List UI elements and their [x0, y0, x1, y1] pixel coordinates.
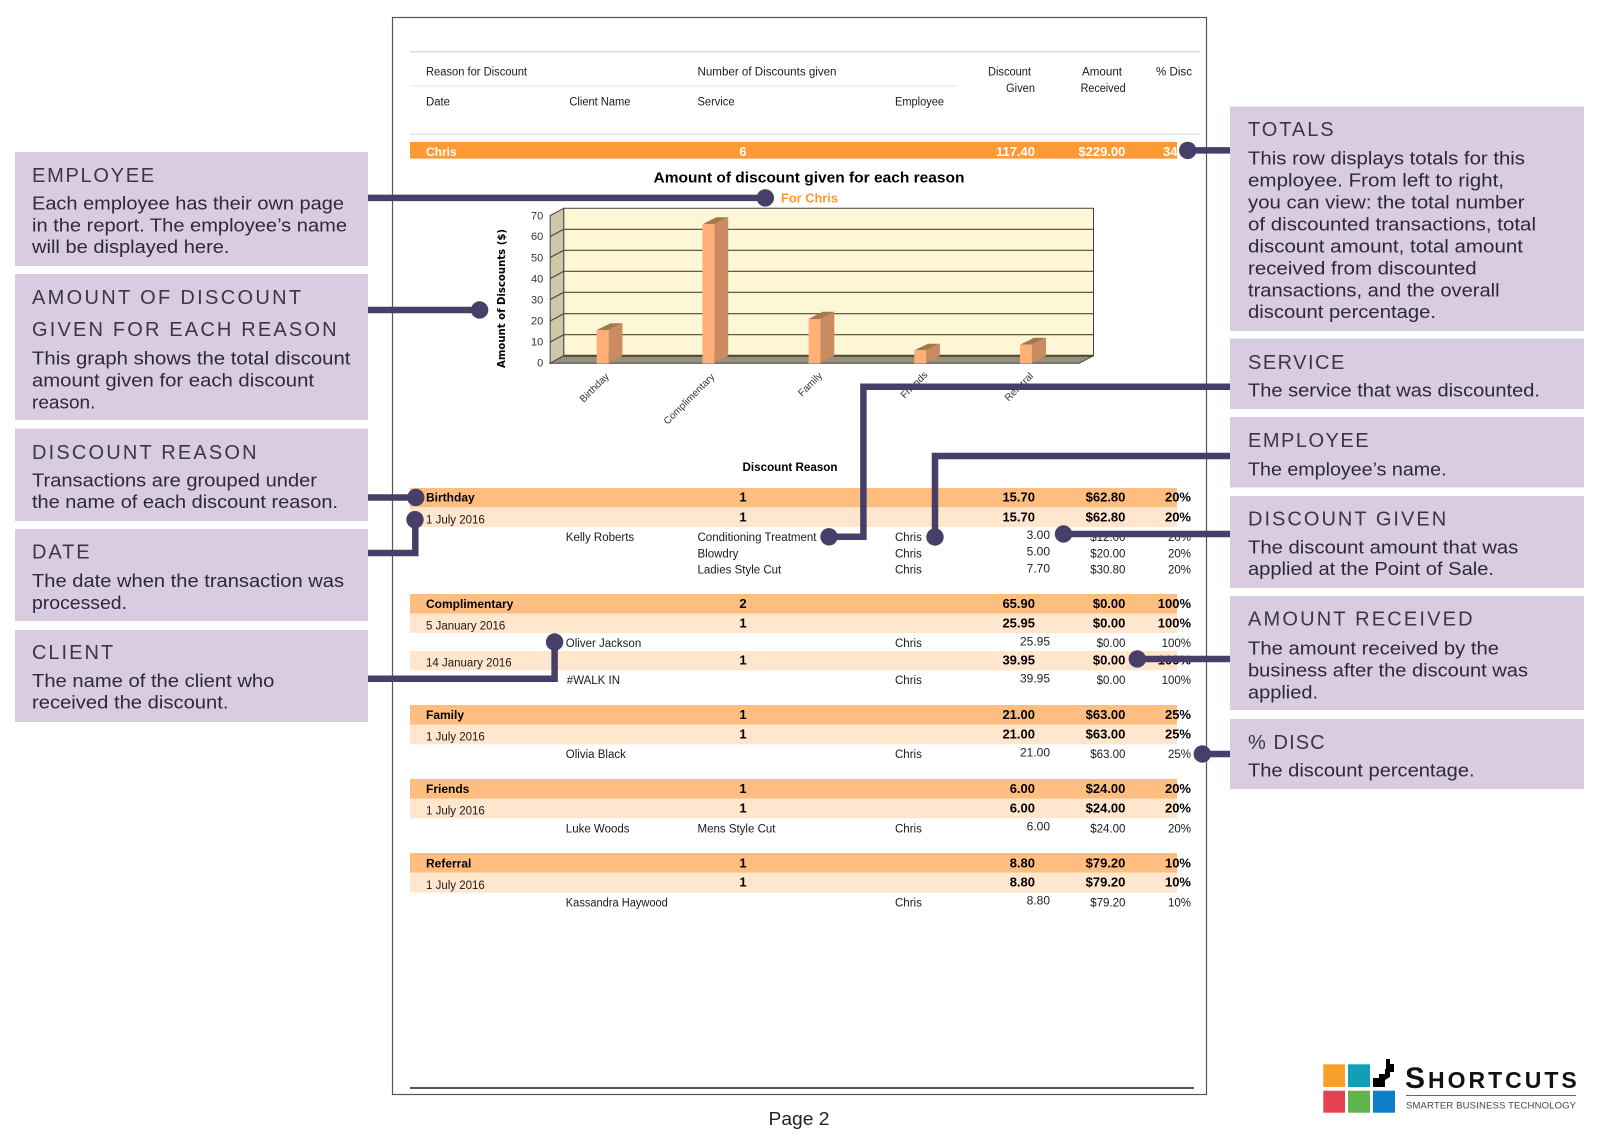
- axis labels: 10: [531, 337, 543, 349]
- group: Complimentary: Chris: [895, 675, 922, 687]
- group: Friends: Friends: [426, 782, 470, 796]
- connector: amount of discount: [368, 301, 488, 319]
- panel: discount reason: [15, 428, 368, 521]
- connector: client: [368, 633, 563, 679]
- group: Complimentary: Oliver Jackson: [566, 638, 641, 650]
- group: Birthday: 3.00: [1027, 528, 1050, 542]
- group: Birthday: Chris: [895, 532, 922, 544]
- group: Birthday: $12.00: [1090, 532, 1125, 544]
- panel: totals: of discounted transactions, total: [1248, 213, 1536, 234]
- employee totals row: 117.40: [996, 144, 1035, 159]
- employee totals row: [410, 142, 1178, 159]
- group: Complimentary: 5 January 2016: [426, 620, 505, 632]
- connector: discount reason: [368, 489, 424, 506]
- panel: totals: you can view: the total number: [1248, 192, 1524, 213]
- panel: employee: Each employee has their own page: [32, 192, 344, 213]
- group: Complimentary: [410, 594, 1191, 687]
- group: Family: 1: [739, 707, 747, 722]
- group: Birthday: $20.00: [1090, 548, 1125, 560]
- group: Complimentary: 25.95: [1002, 615, 1035, 630]
- group: Family: 25%: [1165, 727, 1191, 742]
- page number: Page 2: [768, 1109, 830, 1129]
- report footer rule: [410, 1087, 1194, 1089]
- panel: totals: employee. From left to right,: [1248, 169, 1504, 190]
- axis labels: 50: [531, 252, 543, 264]
- group: Family: 21.00: [1002, 727, 1035, 742]
- panel: amount received: business after the discount was: [1248, 659, 1528, 680]
- employee totals row: 6: [739, 144, 747, 159]
- group: Complimentary: 100%: [1158, 615, 1191, 630]
- group: Referral: [410, 853, 1191, 909]
- panel: amount of discount: [15, 274, 368, 420]
- group: Complimentary: 39.95: [1002, 653, 1035, 668]
- group: Friends: $24.00: [1086, 781, 1125, 796]
- group: Complimentary: 100%: [1158, 653, 1191, 668]
- employee totals row: Chris: [426, 145, 457, 159]
- report column headers: Employee: [895, 96, 944, 108]
- group: Birthday: 5.00: [1027, 545, 1050, 559]
- report column headers: Client Name: [569, 96, 630, 108]
- group: Friends: 6.00: [1010, 781, 1035, 796]
- group: Birthday: 1: [739, 509, 747, 524]
- report column headers: Received: [1081, 83, 1126, 95]
- group: Referral: 1: [739, 855, 747, 870]
- group: Birthday: Blowdry: [698, 548, 739, 560]
- connector: employee name: [926, 456, 1230, 546]
- panel: amount received: The amount received by the: [1248, 637, 1499, 658]
- group: Birthday: 20%: [1165, 490, 1191, 505]
- panel: amount received: AMOUNT RECEIVED: [1248, 609, 1474, 631]
- report column headers: Number of Discounts given: [698, 66, 836, 78]
- x axis labels: Friends: [899, 370, 930, 401]
- group: Friends: 20%: [1165, 801, 1191, 816]
- group: Birthday: 1 July 2016: [426, 514, 485, 526]
- group: Referral: 8.80: [1010, 875, 1035, 890]
- x axis title: Discount Reason: [742, 460, 838, 474]
- group: Family: $63.00: [1086, 727, 1125, 742]
- group: Birthday: 20%: [1165, 509, 1191, 524]
- group: Referral: 10%: [1165, 875, 1191, 890]
- group: Birthday: Kelly Roberts: [566, 532, 634, 544]
- group: Family: [410, 705, 1191, 761]
- panel: totals: discount percentage.: [1248, 301, 1436, 322]
- group: Complimentary: 2: [739, 596, 747, 611]
- group: Friends: 1: [739, 801, 747, 816]
- panel: discount reason: the name of each discount reason.: [32, 491, 338, 512]
- group: Family: 21.00: [1020, 746, 1050, 760]
- panel: client: The name of the client who: [32, 670, 274, 691]
- connector: amount received: [1129, 650, 1230, 668]
- group: Birthday: 20%: [1168, 565, 1191, 577]
- bar: Referral: [1020, 338, 1046, 363]
- report column headers: Reason for Discount: [426, 66, 528, 78]
- panel: amount of discount: reason.: [32, 392, 95, 413]
- group: Birthday: Conditioning Treatment: [698, 532, 817, 544]
- group: Family: Chris: [895, 749, 922, 761]
- report column headers: Date: [426, 96, 450, 108]
- x axis labels: [578, 370, 1036, 427]
- connector: discount given: [1055, 525, 1230, 543]
- group: Referral: 1 July 2016: [426, 880, 485, 892]
- group: Complimentary: $0.00: [1097, 675, 1125, 687]
- panel: totals: transactions, and the overall: [1248, 279, 1500, 300]
- panel: service: The service that was discounted.: [1248, 379, 1540, 400]
- group: Friends: Luke Woods: [566, 823, 630, 835]
- group: Complimentary: $0.00: [1093, 653, 1125, 668]
- group: Family: 1: [739, 727, 747, 742]
- group: Complimentary: 1: [739, 615, 747, 630]
- connector: date: [368, 511, 424, 553]
- panel: service: SERVICE: [1248, 352, 1346, 374]
- x axis labels: Referral: [1003, 371, 1036, 404]
- group: Birthday: $62.80: [1086, 509, 1125, 524]
- group: Referral: $79.20: [1086, 855, 1125, 870]
- panel: totals: discount amount, total amount: [1248, 236, 1523, 256]
- panel: date: processed.: [32, 592, 127, 613]
- panel: totals: TOTALS: [1248, 119, 1335, 141]
- panel: employee: [15, 152, 368, 266]
- group: Birthday: Chris: [895, 565, 922, 577]
- group: Birthday: 15.70: [1002, 490, 1035, 505]
- panel: discount given: [1230, 496, 1584, 588]
- group: Birthday: $30.80: [1090, 565, 1125, 577]
- panel: discount given: applied at the Point of Sale.: [1248, 558, 1494, 579]
- panel: amount of discount: This graph shows the total discount: [32, 347, 350, 368]
- connector: totals: [1179, 142, 1230, 159]
- report column headers: [410, 51, 1200, 135]
- panel: employee: in the report. The employee’s name: [32, 214, 347, 235]
- group: Birthday: Chris: [895, 548, 922, 560]
- panel: percent discount: [1230, 719, 1584, 789]
- x axis labels: Birthday: [578, 371, 612, 405]
- group: Complimentary: 65.90: [1002, 596, 1035, 611]
- group: Complimentary: 100%: [1162, 638, 1191, 650]
- group: Complimentary: 1: [739, 653, 747, 668]
- group: Referral: 10%: [1168, 897, 1191, 909]
- group: Complimentary: 100%: [1162, 675, 1191, 687]
- group: Birthday: 1: [739, 490, 747, 505]
- group: Birthday: Ladies Style Cut: [698, 565, 782, 577]
- group: Complimentary: 100%: [1158, 596, 1191, 611]
- logo: Shortcuts: [1323, 1059, 1577, 1113]
- bar: Friends: [914, 344, 940, 363]
- group: Friends: 6.00: [1010, 801, 1035, 816]
- panel: amount of discount: GIVEN FOR EACH REASON: [32, 319, 338, 341]
- panel: discount reason: DISCOUNT REASON: [32, 442, 258, 464]
- group: Family: $63.00: [1086, 707, 1125, 722]
- report column headers: Given: [1006, 83, 1035, 95]
- x axis labels: Complimentary: [662, 372, 717, 427]
- group: Family: $63.00: [1090, 749, 1125, 761]
- group: Friends: 1: [739, 781, 747, 796]
- panel: percent discount: % DISC: [1248, 732, 1326, 754]
- panel: percent discount: The discount percentage.: [1248, 759, 1475, 780]
- group: Complimentary: $0.00: [1097, 638, 1125, 650]
- panel: employee name: EMPLOYEE: [1248, 430, 1370, 452]
- group: Friends: $24.00: [1090, 823, 1125, 835]
- panel: amount of discount: amount given for each discount: [32, 369, 314, 390]
- group: Referral: 10%: [1165, 855, 1191, 870]
- group: Birthday: 20%: [1168, 532, 1191, 544]
- panel: service: [1230, 338, 1584, 409]
- bar: Family: [809, 312, 834, 363]
- panel: amount of discount: AMOUNT OF DISCOUNT: [32, 287, 302, 309]
- group: Complimentary: 25.95: [1020, 635, 1050, 649]
- wordmark: SHORTCUTS: [1405, 1062, 1577, 1095]
- connector: employee: [368, 189, 774, 207]
- bar chart: [496, 208, 1094, 427]
- report column headers: Discount: [988, 66, 1032, 78]
- group: Referral: Kassandra Haywood: [566, 897, 668, 909]
- group: Birthday: Birthday: [426, 491, 475, 505]
- report column headers: % Disc: [1156, 66, 1192, 78]
- group: Complimentary: 14 January 2016: [426, 657, 512, 669]
- connector: service: [820, 387, 1230, 546]
- panel: date: [15, 529, 368, 621]
- panel: employee name: [1230, 417, 1584, 488]
- panel: client: CLIENT: [32, 642, 114, 664]
- panel: totals: This row displays totals for this: [1248, 147, 1525, 168]
- group: Complimentary: $0.00: [1093, 615, 1125, 630]
- panel: employee name: The employee’s name.: [1248, 458, 1447, 479]
- group: Referral: 1: [739, 875, 747, 890]
- group: Friends: $24.00: [1086, 801, 1125, 816]
- axis labels: 60: [531, 231, 543, 243]
- panel: date: The date when the transaction was: [32, 570, 344, 591]
- panel: client: [15, 630, 368, 722]
- group: Complimentary: #WALK IN: [567, 675, 620, 687]
- axis labels: 0: [537, 358, 543, 370]
- group: Birthday: 15.70: [1002, 509, 1035, 524]
- group: Complimentary: 39.95: [1020, 672, 1050, 686]
- x axis labels: Family: [796, 371, 825, 399]
- group: Referral: 8.80: [1027, 894, 1050, 908]
- axis labels: 20: [531, 316, 543, 328]
- report column headers: Amount: [1082, 66, 1123, 78]
- group: Family: 25%: [1168, 749, 1191, 761]
- group: Friends: Mens Style Cut: [698, 823, 776, 835]
- group: Friends: 6.00: [1027, 820, 1050, 834]
- group: Friends: Chris: [895, 823, 922, 835]
- chart subtitle: For Chris: [781, 190, 838, 206]
- icon: coloured squares: [1323, 1059, 1395, 1113]
- group: Family: 25%: [1165, 707, 1191, 722]
- group: Complimentary: Complimentary: [426, 597, 514, 611]
- employee totals row: $229.00: [1078, 144, 1125, 159]
- group: Family: 21.00: [1002, 707, 1035, 722]
- panel: date: DATE: [32, 542, 91, 564]
- report page frame: [392, 18, 1206, 1094]
- group: Referral: 8.80: [1010, 855, 1035, 870]
- group: Birthday: 7.70: [1027, 561, 1050, 575]
- group: Referral: Referral: [426, 856, 471, 870]
- group: Birthday: [410, 488, 1191, 577]
- panel: amount received: applied.: [1248, 681, 1318, 702]
- y axis title: Amount of Discounts ($): [496, 229, 508, 368]
- group: Family: 1 July 2016: [426, 732, 485, 744]
- axis labels: 70: [531, 210, 543, 222]
- group: Friends: 1 July 2016: [426, 806, 485, 818]
- group: Referral: $79.20: [1090, 897, 1125, 909]
- tagline: SMARTER BUSINESS TECHNOLOGY: [1406, 1100, 1577, 1112]
- group: Friends: 20%: [1165, 781, 1191, 796]
- bar: Birthday: [597, 323, 622, 363]
- panel: discount given: The discount amount that was: [1248, 536, 1518, 557]
- group: Friends: 20%: [1168, 823, 1191, 835]
- axis labels: 40: [531, 273, 543, 285]
- group: Birthday: 20%: [1168, 548, 1191, 560]
- panel: client: received the discount.: [32, 692, 228, 713]
- panel: employee: EMPLOYEE: [32, 165, 156, 187]
- panel: employee: will be displayed here.: [31, 236, 229, 257]
- panel: totals: [1230, 106, 1584, 331]
- employee totals row: 34: [1163, 144, 1178, 159]
- connector: percent discount: [1194, 745, 1230, 763]
- group: Referral: $79.20: [1086, 875, 1125, 890]
- panel: discount reason: Transactions are grouped under: [32, 469, 317, 490]
- panel: amount received: [1230, 596, 1584, 710]
- group: Birthday: $62.80: [1086, 490, 1125, 505]
- chart title: Amount of discount given for each reason: [654, 170, 964, 186]
- panel: totals: received from discounted: [1248, 257, 1477, 278]
- group: Complimentary: Chris: [895, 638, 922, 650]
- bar: Complimentary: [702, 217, 728, 363]
- axis labels: [531, 210, 543, 370]
- group: Referral: Chris: [895, 897, 922, 909]
- group: Family: Olivia Black: [566, 749, 626, 761]
- report column headers: Service: [698, 96, 734, 108]
- group: Complimentary: $0.00: [1093, 596, 1125, 611]
- axis labels: 30: [531, 295, 543, 307]
- group: Family: Family: [426, 708, 464, 722]
- group: Friends: [410, 779, 1191, 835]
- panel: discount given: DISCOUNT GIVEN: [1248, 509, 1448, 531]
